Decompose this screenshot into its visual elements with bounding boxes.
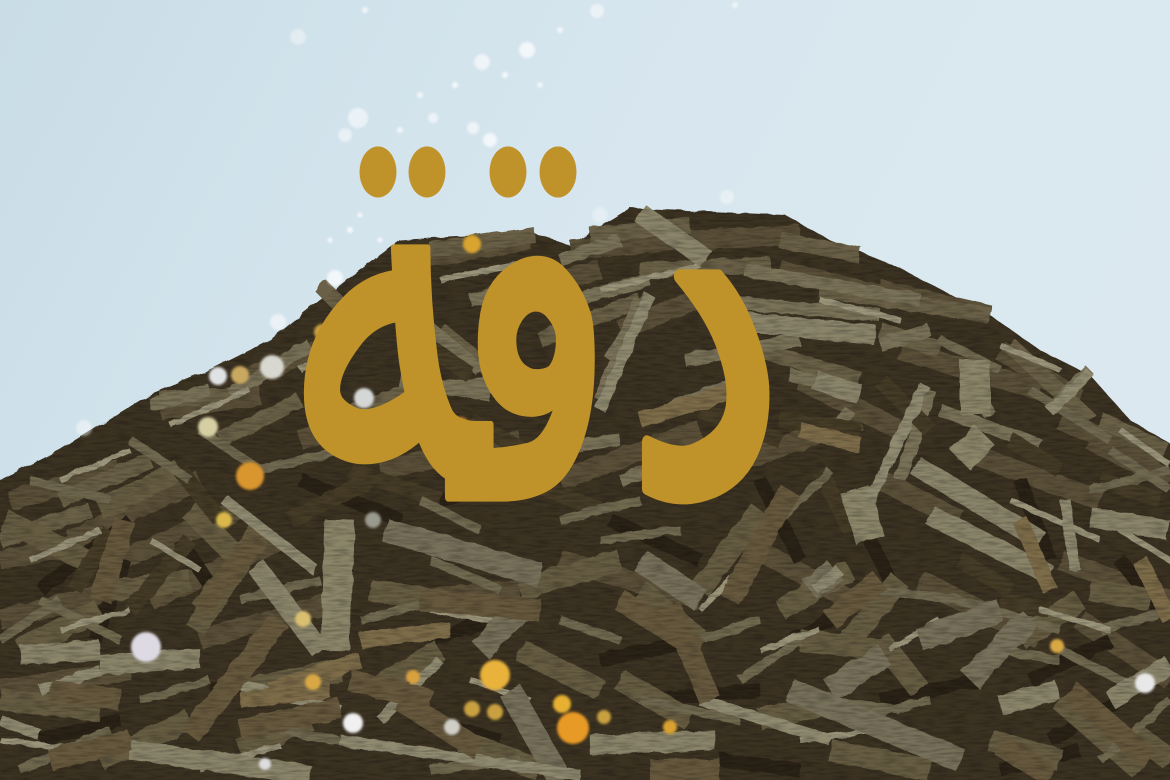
grain overlay <box>0 208 1170 780</box>
mid layer chips <box>0 240 1170 770</box>
sparkles over sky <box>76 2 738 436</box>
letter dal: د <box>625 15 785 609</box>
back layer chips <box>0 225 1170 770</box>
gold and white bokeh <box>131 235 1155 770</box>
title word: دقة <box>304 146 770 504</box>
front layer highlighted chips <box>0 213 1170 780</box>
pile base silhouette <box>0 208 1170 780</box>
letter qaf body: ق‍ <box>446 42 616 614</box>
wood chip pile <box>0 208 1170 780</box>
wood grain texture <box>0 208 1170 780</box>
